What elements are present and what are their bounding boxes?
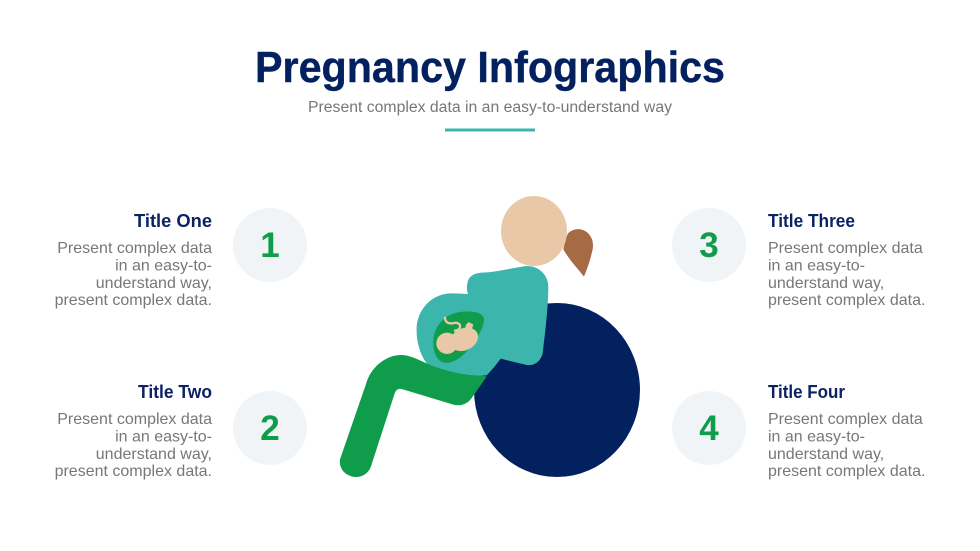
accent underline bbox=[445, 128, 535, 132]
item 3 body text: Present complex data bbox=[768, 240, 923, 257]
item 1 number badge bbox=[233, 208, 307, 282]
item 2 body text bbox=[55, 411, 212, 480]
item 2 body text: Present complex data bbox=[57, 411, 212, 428]
item 4 body text bbox=[768, 411, 925, 480]
title: Pregnancy Infographics bbox=[255, 43, 725, 92]
item 3 heading: Title Three bbox=[768, 211, 855, 231]
exercise ball bbox=[474, 303, 640, 477]
item 4 heading: Title Four bbox=[768, 382, 845, 402]
item 1: title one bbox=[55, 208, 307, 309]
item 4 body text: understand way, bbox=[768, 446, 884, 463]
item 4 body text: present complex data. bbox=[768, 463, 925, 480]
item 3 body text bbox=[768, 240, 925, 309]
item 3 body text: present complex data. bbox=[768, 292, 925, 309]
item 2 number badge bbox=[233, 391, 307, 465]
item 4 body text: Present complex data bbox=[768, 411, 923, 428]
item 3 number badge: 3 bbox=[699, 226, 719, 265]
item 3: title three bbox=[672, 208, 925, 309]
item 3 number badge bbox=[672, 208, 746, 282]
item 2 number badge: 2 bbox=[260, 409, 280, 448]
item 4 number badge: 4 bbox=[699, 409, 719, 448]
item 1 heading: Title One bbox=[134, 211, 212, 231]
item 1 body text bbox=[55, 240, 212, 309]
womb bbox=[433, 312, 484, 363]
item 4: title four bbox=[672, 382, 925, 480]
item 1 body text: in an easy-to- bbox=[115, 258, 212, 274]
item 1 number badge: 1 bbox=[260, 226, 280, 265]
item 4 number badge bbox=[672, 391, 746, 465]
item 3 body text: in an easy-to- bbox=[768, 258, 865, 274]
item 4 body text: in an easy-to- bbox=[768, 428, 865, 446]
item 2: title two bbox=[55, 382, 307, 480]
item 2 body text: understand way, bbox=[96, 446, 212, 463]
subtitle: Present complex data in an easy-to-understand way bbox=[308, 99, 672, 116]
item 2 body text: present complex data. bbox=[55, 463, 212, 480]
hair ponytail bbox=[563, 229, 593, 277]
fetus bbox=[436, 317, 482, 355]
illustration: pregnant woman on exercise ball bbox=[340, 196, 640, 477]
head bbox=[501, 196, 567, 266]
item 1 body text: understand way, bbox=[96, 275, 212, 292]
leg bbox=[340, 355, 487, 477]
item 1 body text: present complex data. bbox=[55, 292, 212, 309]
item 1 body text: Present complex data bbox=[57, 240, 212, 257]
item 2 heading: Title Two bbox=[138, 382, 212, 402]
torso and belly bbox=[417, 266, 548, 376]
item 3 body text: understand way, bbox=[768, 275, 884, 292]
item 2 body text: in an easy-to- bbox=[115, 428, 212, 446]
